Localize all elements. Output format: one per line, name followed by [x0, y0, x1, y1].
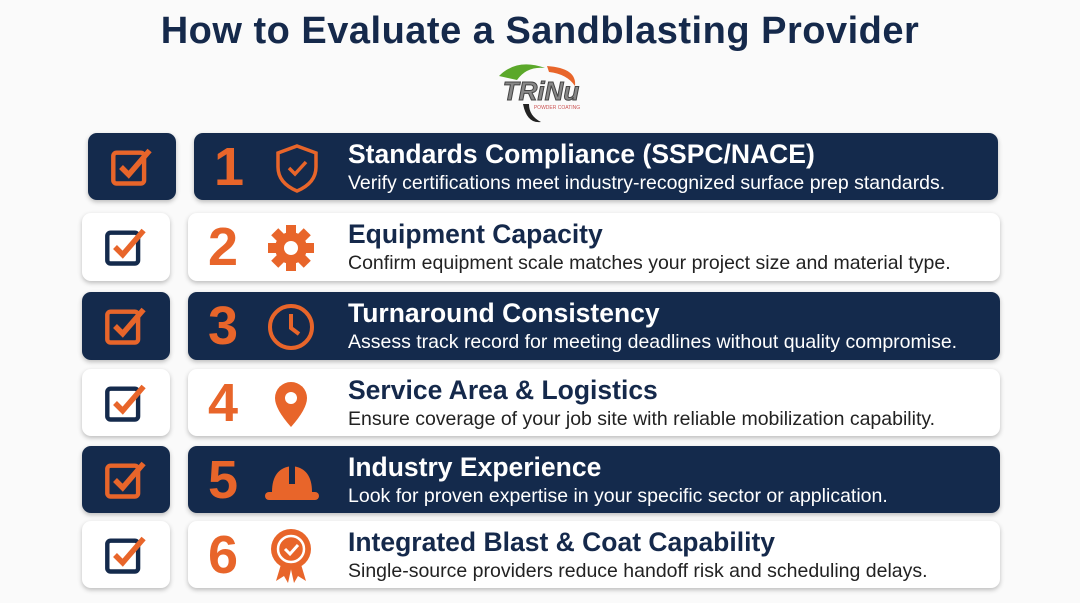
row 6 [80, 520, 1002, 592]
card 4: 4 [208, 373, 238, 433]
card 1: 1 [214, 137, 244, 197]
logo [499, 64, 580, 122]
checkbox 2 [82, 213, 170, 281]
logo: POWDER COATING [534, 105, 580, 111]
logo: TRiNu [503, 76, 579, 106]
row 2 [80, 212, 1002, 286]
checkbox 5 [82, 446, 170, 513]
card 1 [194, 133, 998, 200]
checkbox 3 [82, 292, 170, 360]
card 6: Integrated Blast & Coat Capability [348, 527, 775, 557]
card 4: Ensure coverage of your job site with reliable mobilization capability. [348, 408, 935, 430]
row 1 [86, 132, 1000, 204]
card 5 [188, 446, 1000, 513]
card 3: Turnaround Consistency [348, 298, 660, 328]
checkbox 1 [88, 133, 176, 200]
card 5: 5 [208, 450, 238, 510]
card 6 [188, 521, 1000, 588]
card 1: Standards Compliance (SSPC/NACE) [348, 139, 815, 169]
card 6: Single-source providers reduce handoff risk and scheduling delays. [348, 560, 928, 582]
card 4: Service Area & Logistics [348, 375, 658, 405]
row 3 [80, 292, 1002, 364]
checkbox 6 [82, 521, 170, 588]
card 2: Confirm equipment scale matches your project size and material type. [348, 252, 951, 274]
title: How to Evaluate a Sandblasting Provider [161, 10, 919, 52]
row 4 [80, 368, 1002, 440]
card 4 [188, 369, 1000, 436]
card 2 [188, 213, 1000, 281]
card 6: 6 [208, 525, 238, 585]
card 3 [188, 292, 1000, 360]
card 3: 3 [208, 296, 238, 356]
card 3: Assess track record for meeting deadlines without quality compromise. [348, 331, 957, 353]
checkbox 4 [82, 369, 170, 436]
card 2: Equipment Capacity [348, 219, 603, 249]
card 5: Look for proven expertise in your specific sector or application. [348, 485, 888, 507]
card 2: 2 [208, 217, 238, 277]
card 1: Verify certifications meet industry-recognized surface prep standards. [348, 172, 945, 194]
card 5: Industry Experience [348, 452, 601, 482]
row 5 [80, 446, 1002, 518]
